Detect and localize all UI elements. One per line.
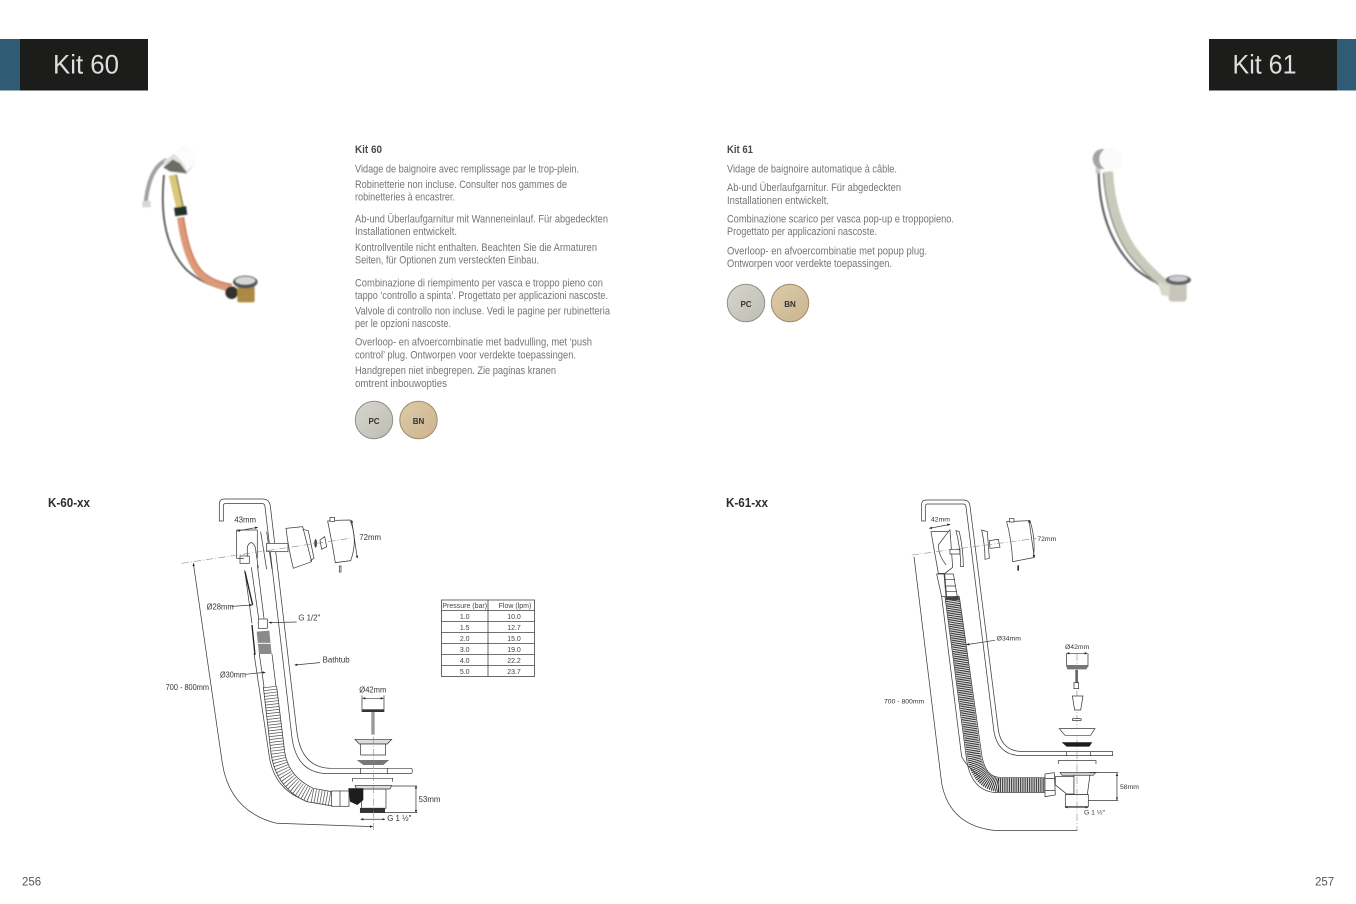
corrugated hose [937,574,1045,793]
text block: Kit 61 description: Combinazione scarico per vasca pop-up e troppopieno. [727,214,954,226]
bathtub outline [219,499,412,774]
flow table: 15.0 [507,636,521,643]
dimension labels: Ø28mm [207,602,234,611]
header: Kit 60: Kit 60 [53,50,119,80]
text block: Kit 60 description: Seiten, für Optionen zum versteckten Einbau. [355,254,539,266]
product photo: Kit 60 waste and overflow [142,147,258,302]
flow table: 2.0 [460,636,470,643]
dimension labels: Ø34mm [997,636,1021,643]
dimension lines [182,520,417,827]
text block: Kit 60 description: Handgrepen niet inbegrepen. Zie paginas kranen [355,365,556,377]
flow table: Pressure (bar) [442,603,487,610]
text block: Kit 61 description: Vidage de baignoire automatique à câble. [727,164,897,176]
dimension labels: Ø42mm [359,686,386,695]
dimension labels: 42mm [931,516,950,523]
flow table: Flow (lpm) [499,603,531,610]
model label: K-61-xx: K-61-xx [726,496,768,510]
text block: Kit 60 description: Combinazione di riempimento per vasca e troppo pieno con [355,278,603,290]
text block: Kit 60 description: control’ plug. Ontworpen voor verdekte toepassingen. [355,350,576,362]
finish swatches: Kit 60: BN [413,417,424,426]
text block: Kit 61 description: Progettato per applicazioni nascoste. [727,226,877,238]
text block: Kit 60 description [355,144,610,390]
dimension labels: 58mm [1120,784,1139,791]
overflow assembly [931,519,1034,573]
finish swatches: Kit 61: PC [740,300,752,309]
flow table: 4.0 [460,658,470,665]
finish swatches: Kit 61: BN [784,300,796,309]
text block: Kit 60 description: Installationen entwickelt. [355,226,457,238]
dimension labels: Ø42mm [1065,644,1090,651]
text block: Kit 60 description: Kit 60 [355,144,382,156]
flow table: 1.5 [460,625,470,632]
dimension labels: Ø30mm [220,671,246,680]
dimension labels [166,516,440,823]
text block: Kit 61 description: Overloop- en afvoercombinatie met popup plug. [727,246,927,258]
dimension labels: G 1 ½" [1084,809,1106,817]
dimension labels: 43mm [234,516,256,525]
finish swatches: Kit 60: PC [368,417,380,426]
dimension lines [912,520,1118,831]
waste assembly [1045,653,1096,831]
dimension labels: G 1/2" [298,614,320,623]
text block: Kit 61 description: Installationen entwickelt. [727,195,829,207]
finish swatches: Kit 60 [355,401,437,439]
technical drawing: Kit 60 [166,499,440,830]
flow table: 3.0 [460,647,470,654]
text block: Kit 60 description: tappo ‘controllo a spinta’. Progettato per applicazioni nascoste. [355,290,608,302]
bathtub outline [922,500,1113,756]
dimension labels: Bathtub [323,656,350,665]
flow table: 19.0 [507,647,521,654]
header: Kit 60 [0,39,148,90]
finish swatches: Kit 61 [727,284,809,322]
flow table: 10.0 [507,614,521,621]
flow table: 23.7 [507,669,521,676]
text block: Kit 60 description: per le opzioni nascoste. [355,318,451,330]
push plug and waste assembly [348,695,393,830]
text block: Kit 61 description: Kit 61 [727,144,753,156]
model label: K-60-xx: K-60-xx [48,496,90,510]
text block: Kit 60 description: Overloop- en afvoercombinatie met badvulling, met ‘push [355,336,592,348]
dimension labels: G 1 ½" [387,814,412,823]
flow table [442,600,534,676]
text block: Kit 61 description: Ontworpen voor verdekte toepassingen. [727,258,892,270]
text block: Kit 61 description: Ab-und Überlaufgarnitur. Für abgedeckten [727,182,901,194]
supply and waste pipe [245,565,276,687]
product photo: Kit 61 waste and overflow [1093,147,1191,302]
dimension labels [884,516,1139,817]
text block: Kit 60 description: Ab-und Überlaufgarnitur mit Wanneneinlauf. Für abgedeckten [355,214,608,226]
dimension labels: 700 - 800mm [166,683,209,692]
text block: Kit 60 description: Robinetterie non incluse. Consulter nos gammes de [355,179,567,191]
technical drawing: Kit 61 [884,500,1139,831]
dimension labels: 72mm [359,533,381,542]
dimension labels: 700 - 800mm [884,699,925,706]
text block: Kit 60 description: omtrent inbouwopties [355,378,447,390]
page number 257: 257 [1315,876,1334,888]
text block: Kit 60 description: Valvole di controllo non incluse. Vedi le pagine per rubinetteria [355,306,610,318]
header: Kit 61 [1209,39,1356,90]
text block: Kit 60 description: Vidage de baignoire avec remplissage par le trop-plein. [355,164,579,176]
page number 256: 256 [22,876,41,888]
flow table: 22.2 [507,658,521,665]
text block: Kit 60 description: robinetteries à encastrer. [355,192,455,204]
overflow body [237,517,354,572]
text block: Kit 61 description [727,144,954,270]
header: Kit 61: Kit 61 [1232,50,1296,80]
flow table: 1.0 [460,614,470,621]
flow table: 5.0 [460,669,470,676]
flow table: 12.7 [507,625,521,632]
dimension labels: 72mm [1037,536,1057,543]
text block: Kit 60 description: Kontrollventile nicht enthalten. Beachten Sie die Armaturen [355,242,597,254]
dimension labels: 53mm [419,795,440,804]
corrugated hose [254,653,349,806]
